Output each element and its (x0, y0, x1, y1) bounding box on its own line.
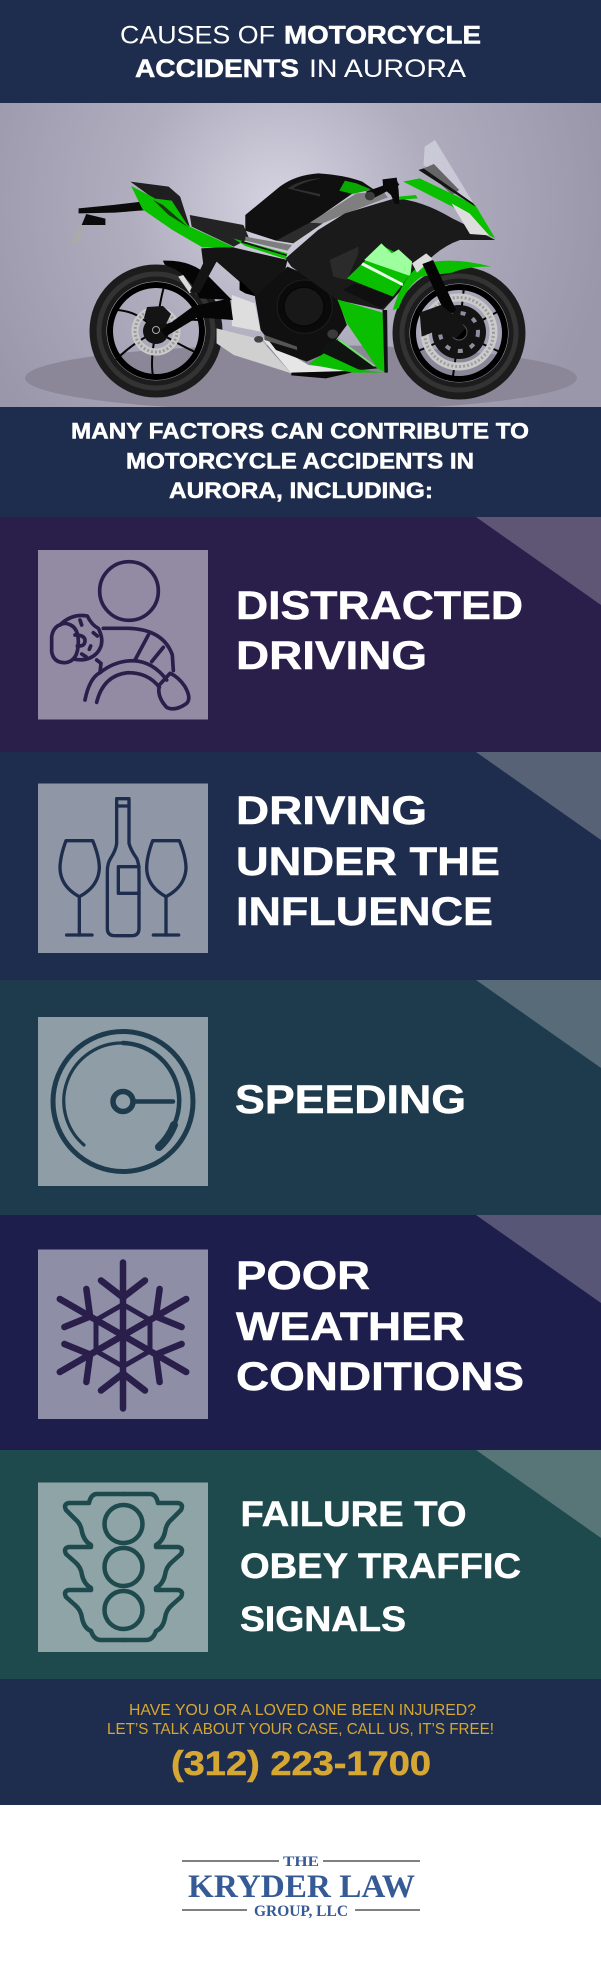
logo: GROUP, LLC (254, 1903, 348, 1920)
intro band: MANY FACTORS CAN CONTRIBUTE TO (71, 418, 529, 444)
belly pan (217, 295, 362, 378)
engine (254, 267, 347, 362)
seat and tail (130, 182, 249, 247)
logo (182, 1854, 420, 1920)
main fairing (286, 198, 495, 310)
heading: driving under the influence: DRIVING (236, 789, 427, 833)
heading: driving under the influence (236, 789, 500, 934)
heading: distracted driving: DISTRACTED (236, 584, 523, 628)
fork (412, 253, 466, 338)
heading: failure to obey traffic signals: SIGNALS (240, 1600, 406, 1639)
title (0, 0, 601, 103)
heading: poor weather conditions (236, 1254, 524, 1399)
heading: poor weather conditions: POOR (236, 1254, 370, 1298)
intro band: AURORA, INCLUDING: (169, 478, 433, 503)
front fender (393, 261, 491, 310)
heading: failure to obey traffic signals: FAILURE TO (240, 1495, 466, 1534)
panel: driving under the influence (0, 752, 601, 980)
call to action (0, 1679, 601, 1805)
panel: speeding (0, 980, 601, 1215)
icon: wine bottle and glasses (60, 799, 186, 936)
icon: driver eating donut (52, 562, 189, 709)
heading: failure to obey traffic signals: OBEY TRAFFIC (240, 1547, 521, 1586)
title: CAUSES OF (120, 22, 275, 50)
call to action: HAVE YOU OR A LOVED ONE BEEN INJURED? (129, 1702, 476, 1719)
green fairing panel (347, 243, 412, 297)
icon: traffic light (65, 1494, 182, 1640)
panel: motorcycle illustration (0, 103, 601, 411)
panel: poor weather conditions (0, 1215, 601, 1450)
rear wheel (98, 273, 214, 389)
rear fender and frame (163, 247, 287, 300)
intro band: MOTORCYCLE ACCIDENTS IN (126, 448, 474, 474)
logo: KRYDER LAW (188, 1869, 415, 1905)
lower green fairing (309, 299, 388, 373)
heading: poor weather conditions: WEATHER (236, 1305, 465, 1349)
intro band (0, 407, 601, 517)
icon: snowflake (49, 1262, 197, 1408)
handlebar (365, 178, 399, 204)
title: IN AURORA (309, 55, 466, 83)
heading: failure to obey traffic signals (240, 1495, 521, 1639)
panel: failure to obey traffic signals (0, 1450, 601, 1679)
title: ACCIDENTS (135, 55, 299, 83)
logo: THE (283, 1854, 319, 1870)
call to action: (312) 223-1700 (171, 1745, 431, 1783)
front wheel (401, 275, 517, 391)
swingarm (161, 298, 233, 337)
panel: distracted driving (0, 517, 601, 752)
windscreen and nose (397, 140, 495, 238)
heading: speeding: SPEEDING (235, 1078, 466, 1122)
title: MOTORCYCLE (284, 22, 481, 50)
heading: distracted driving (236, 584, 523, 678)
heading: driving under the influence: UNDER THE (236, 840, 500, 884)
icon: speedometer (53, 1032, 193, 1172)
motorcycle body (69, 140, 495, 378)
side stripes (233, 237, 292, 259)
fuel tank (245, 173, 388, 243)
call to action: LET’S TALK ABOUT YOUR CASE, CALL US, IT’S FREE! (107, 1721, 494, 1738)
heading: poor weather conditions: CONDITIONS (236, 1355, 524, 1399)
licence plate holder (69, 202, 148, 245)
heading: distracted driving: DRIVING (236, 634, 427, 678)
heading: driving under the influence: INFLUENCE (236, 890, 493, 934)
